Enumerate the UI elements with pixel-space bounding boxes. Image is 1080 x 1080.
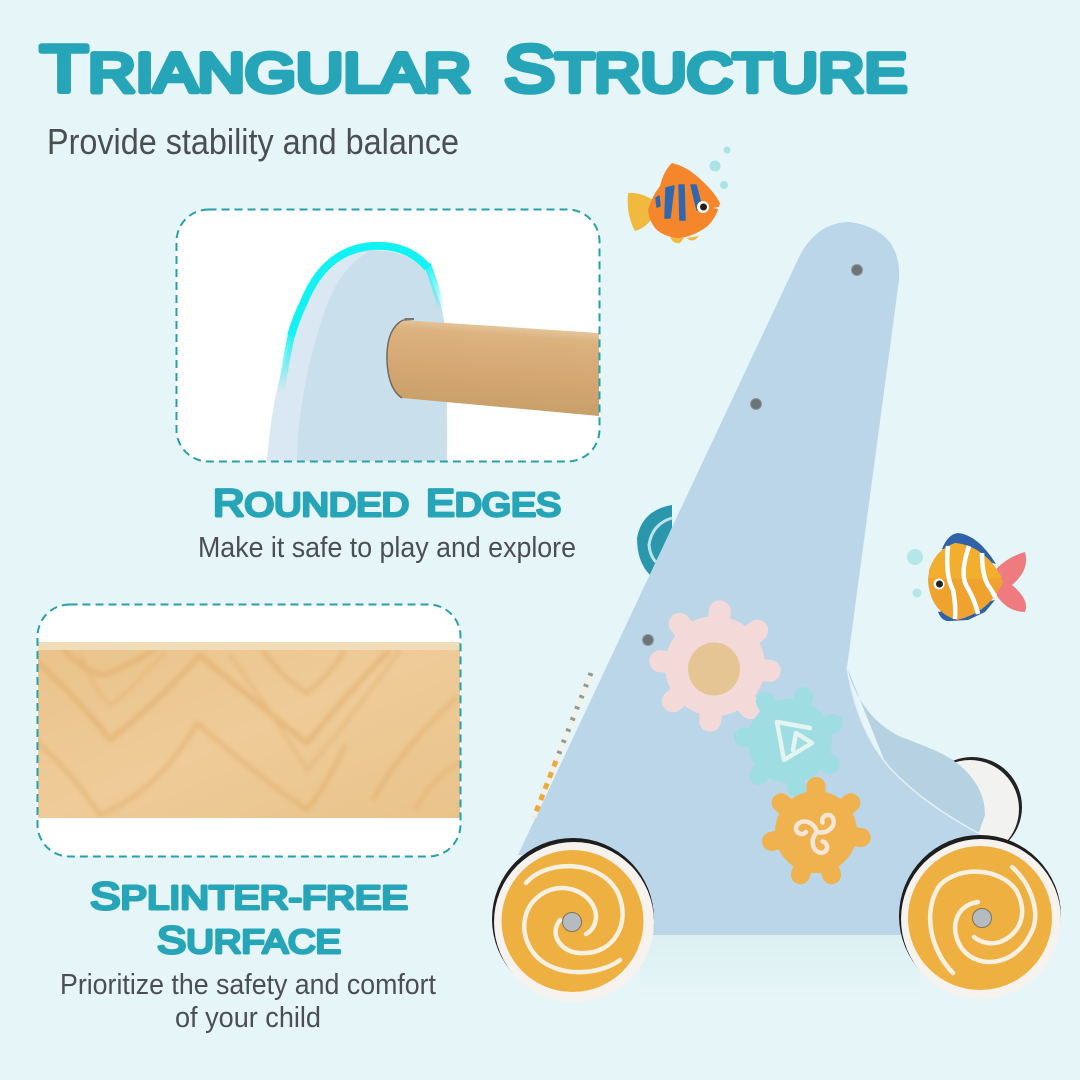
title [40, 32, 907, 106]
plate edge [267, 252, 368, 461]
heading: rounded edges [213, 483, 561, 525]
heading: rounded edges: ROUNDED [213, 483, 409, 525]
floor shadow [640, 935, 920, 1000]
text: rounded edges caption: Make it safe to play and explore [198, 532, 576, 564]
subtitle: Provide stability and balance [47, 121, 459, 162]
handle side plate [267, 250, 447, 461]
icon: clownfish [907, 533, 1026, 621]
back leg piece [847, 667, 985, 838]
heading: splinter-free surface [90, 876, 408, 962]
panel: splinter-free photo [35, 604, 460, 856]
wood plank [35, 642, 460, 818]
heading: splinter-free surface: SURFACE [157, 920, 341, 962]
rear wheel [899, 835, 1061, 999]
title: TRIANGULAR [40, 32, 471, 106]
front wheel [492, 838, 654, 1002]
pink gear [648, 599, 782, 733]
walker illustration [492, 222, 1061, 1002]
screws [642, 264, 862, 646]
orange gear [760, 777, 872, 887]
heading: rounded edges: EDGES [426, 483, 561, 525]
rear teal wheel [637, 505, 672, 575]
inner arc [847, 667, 980, 834]
teal gear [733, 685, 845, 798]
text: splinter-free caption: Prioritize the safety and comfort [60, 969, 436, 1001]
back wheel [921, 757, 1022, 858]
side panel [518, 222, 980, 935]
wooden handle [387, 320, 599, 416]
text: splinter-free caption [60, 969, 436, 1034]
text: splinter-free caption: of your child [175, 1002, 321, 1034]
panel: rounded edges photo [176, 210, 600, 462]
abacus strip [534, 673, 591, 817]
title: STRUCTURE [504, 32, 907, 106]
heading: splinter-free surface: SPLINTER-FREE [90, 876, 408, 918]
glow edge [281, 246, 441, 392]
icon: orange fish [628, 146, 730, 243]
